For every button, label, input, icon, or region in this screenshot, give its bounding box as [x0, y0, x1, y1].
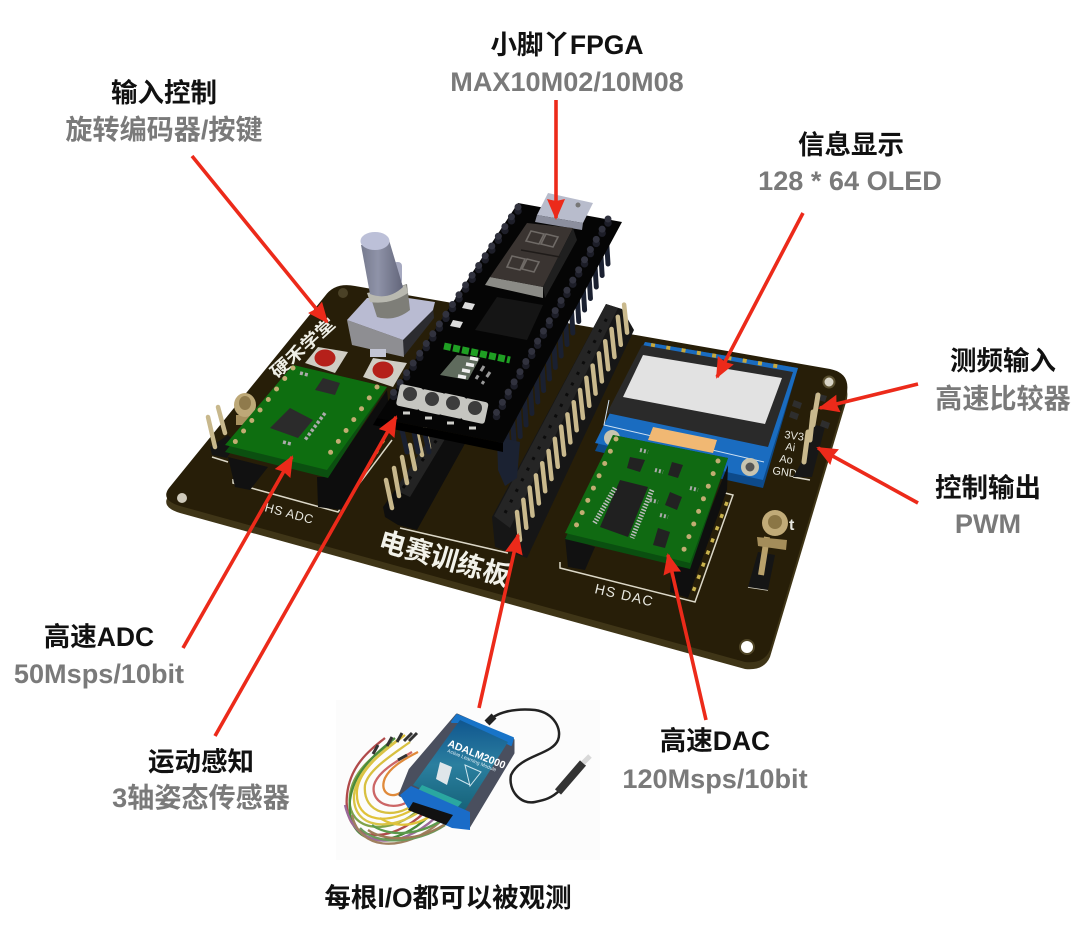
label: display: 128 * 64 OLED — [758, 165, 942, 196]
ADALM2000 device photo — [336, 700, 600, 860]
ADC module — [225, 365, 391, 510]
board silkscreen: brand text: 硬禾学堂 — [267, 314, 339, 382]
arrow: motion sensor — [215, 417, 396, 736]
label: input control — [65, 78, 263, 145]
arrow: DAC — [668, 555, 706, 720]
OLED module — [595, 342, 798, 488]
label: ADC: 50Msps/10bit — [14, 658, 184, 689]
arrow: I/O probing — [479, 535, 518, 708]
arrow: FPGA — [554, 100, 558, 218]
label: control output: 控制输出 — [935, 473, 1041, 503]
seven-segment display — [485, 223, 577, 298]
label: display: 信息显示 — [798, 130, 904, 160]
USB cable — [487, 710, 590, 802]
label: FPGA: MAX10M02/10M08 — [450, 66, 684, 97]
board silkscreen: pin names: Ao — [779, 453, 794, 467]
label: DAC: 120Msps/10bit — [622, 763, 808, 794]
label: DAC — [622, 726, 808, 794]
board silkscreen: board name: 电赛训练板 — [375, 525, 514, 592]
device label: ADALM2000 — [446, 738, 507, 772]
callout arrows — [183, 100, 918, 736]
device shell — [400, 715, 513, 828]
board silkscreen: HS DAC: HS DAC — [593, 580, 655, 609]
label: input control: 输入控制 — [111, 78, 217, 108]
left black socket header with pins — [383, 428, 467, 530]
label: frequency input: 测频输入 — [950, 346, 1056, 376]
arrow: OLED — [717, 213, 803, 377]
push buttons — [305, 347, 407, 387]
label: ADC — [14, 622, 184, 689]
DAC module — [565, 435, 728, 598]
SMA connector and header, lower right — [748, 510, 788, 590]
pin strip window — [417, 785, 462, 808]
long black socket header with pins — [492, 304, 634, 558]
four push keys — [396, 384, 489, 428]
device label — [436, 738, 507, 786]
label: control output — [935, 473, 1041, 539]
USB connector — [535, 193, 593, 230]
jumper wires — [345, 735, 448, 844]
board silkscreen: pin names: 3V3 — [784, 429, 805, 444]
board silkscreen: pin names — [772, 429, 805, 534]
DIP switch — [440, 355, 480, 380]
blue bumpers and connector — [400, 786, 470, 830]
label: I/O observation: 每根I/O都可以被观测 — [324, 883, 572, 913]
label: display — [758, 130, 942, 196]
left two-pin header and SMA connector — [208, 393, 256, 458]
panel: PCB board — [166, 285, 847, 669]
arrow: control output — [818, 448, 918, 503]
FPGA board pins (under side) — [507, 232, 608, 460]
arrow: ADC — [183, 457, 292, 648]
main chip — [475, 297, 543, 340]
on-board pin studs — [387, 211, 608, 426]
rotary encoder knob — [347, 232, 435, 357]
SMD resistor marks — [476, 366, 490, 384]
label: motion sensing: 运动感知 — [148, 747, 254, 777]
label: motion sensing: 3轴姿态传感器 — [112, 782, 290, 813]
FPGA board — [373, 193, 622, 486]
board silkscreen: pin names: GND — [772, 465, 798, 480]
board silkscreen: pin names: t — [789, 517, 795, 534]
label: frequency input: 高速比较器 — [935, 383, 1071, 414]
label: ADC: 高速ADC — [44, 622, 154, 652]
right pin header with comparator parts — [789, 393, 830, 477]
device label: Active Learning Module — [446, 748, 497, 774]
board silkscreen: HS ADC: HS ADC — [263, 500, 315, 527]
LED row — [444, 346, 510, 360]
label: FPGA: 小脚丫FPGA — [490, 30, 644, 60]
label: frequency input — [935, 346, 1071, 414]
arrow: frequency input — [820, 384, 918, 408]
label: FPGA — [450, 30, 684, 97]
label: motion sensing — [112, 747, 290, 813]
label: control output: PWM — [955, 508, 1021, 539]
board silkscreen: pin names: Ai — [785, 441, 796, 454]
label: input control: 旋转编码器/按键 — [65, 114, 263, 145]
arrow: rotary encoder — [192, 156, 327, 322]
label: DAC: 高速DAC — [660, 726, 770, 756]
RGB LEDs — [450, 302, 475, 328]
